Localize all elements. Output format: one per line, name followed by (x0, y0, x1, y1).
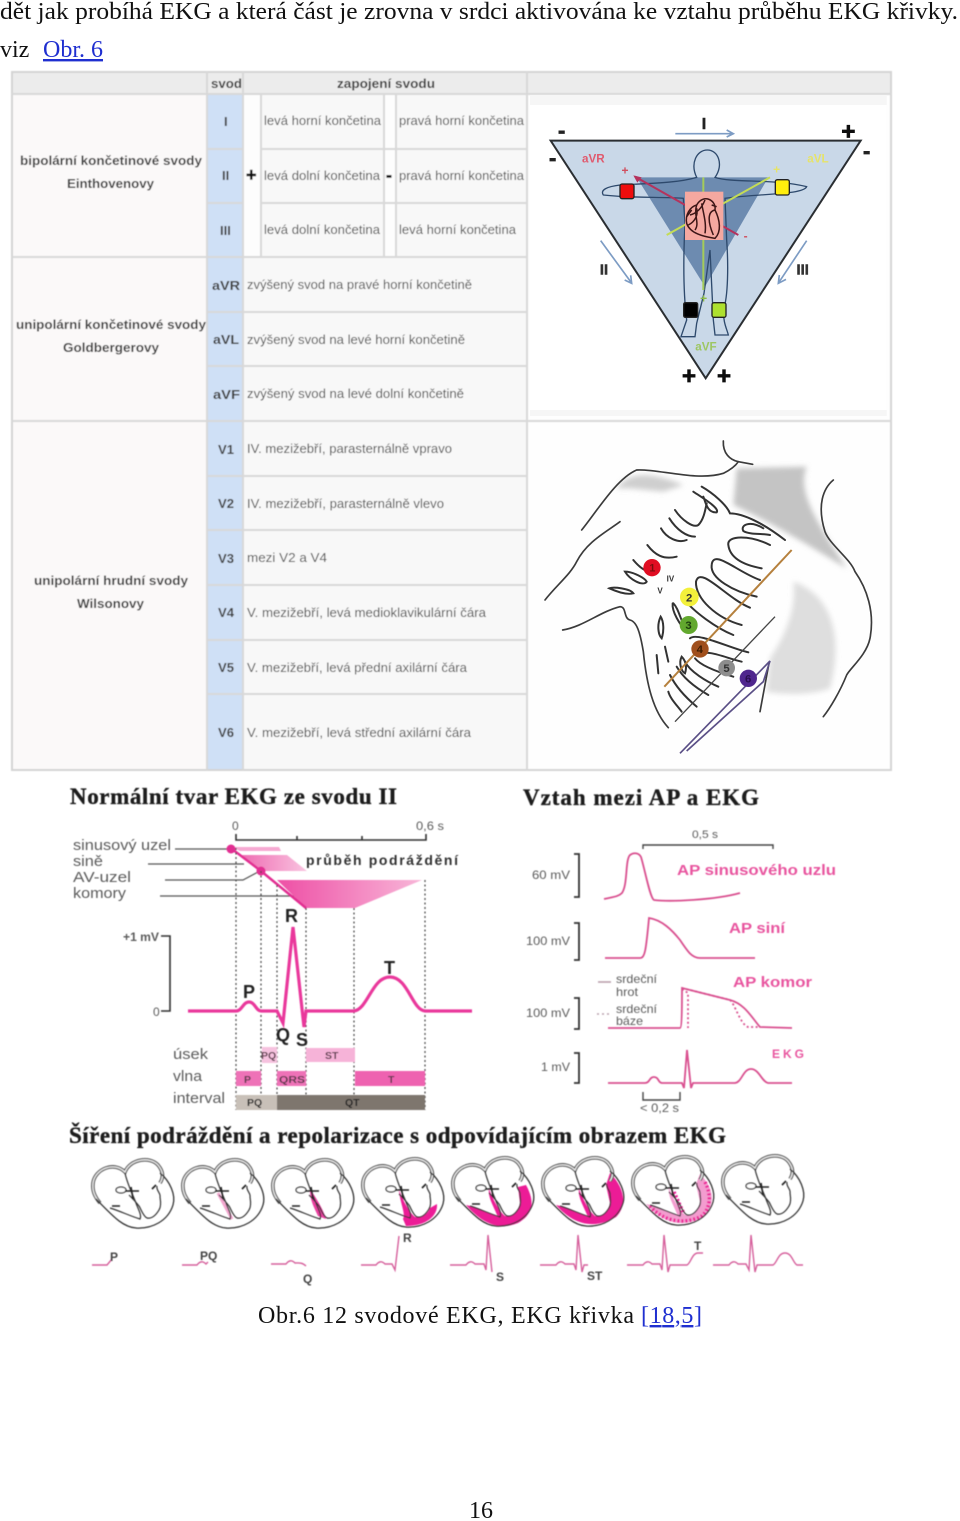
intro text line 2 with link: viz (0, 37, 29, 63)
segment bars: vlna (173, 1068, 203, 1085)
heart stage ST (543, 1158, 624, 1226)
triangle labels: + (700, 291, 707, 305)
triangle labels: + (621, 163, 628, 177)
lead wiring text: levá dolní končetina (264, 168, 381, 183)
triangle labels: + (682, 363, 696, 390)
chest electrode diagram (545, 441, 871, 753)
lead wiring text: pravá horní končetina (399, 113, 525, 128)
apex and base legend (597, 972, 658, 1028)
ECG fragment labels (110, 1231, 702, 1286)
ECG fragment labels: P (110, 1250, 118, 1264)
segment bars (173, 1046, 425, 1110)
ECG waveform (188, 927, 472, 1027)
amplitude scale (123, 932, 170, 1019)
ECG fragment labels: ST (587, 1269, 603, 1283)
voltage scales: 100 mV (526, 934, 570, 948)
wave letters: R (285, 906, 298, 926)
electrode V2 (680, 588, 699, 606)
triangle labels: II (600, 263, 608, 279)
time scale (640, 829, 773, 1115)
electrode V5: 5 (723, 663, 730, 675)
timescale: 0 (232, 819, 239, 833)
shoulder shading (617, 467, 847, 694)
triangle labels: - (558, 118, 565, 143)
excitation spread panel (69, 1122, 804, 1286)
apex and base legend: srdeční (616, 972, 658, 986)
heart stage Q (273, 1160, 354, 1228)
lead names: aVF (213, 387, 240, 402)
triangle labels: aVR (582, 152, 605, 165)
pink curve labels: EKG (772, 1047, 804, 1061)
triangle labels: - (863, 138, 870, 163)
lead wiring text: zvýšený svod na pravé horní končetině (247, 277, 472, 292)
intercostal labels: IV (667, 575, 675, 584)
lead direction arrows (601, 130, 807, 283)
normal ECG from lead II panel (70, 784, 472, 1110)
voltage scales (526, 854, 579, 1083)
group labels: Einthovenovy (67, 176, 155, 191)
lead names: III (220, 223, 231, 238)
electrode V6: 6 (745, 673, 751, 685)
pink curve labels: AP komor (733, 974, 812, 991)
lead names: aVL (213, 332, 239, 347)
voltage scales: 1 mV (541, 1060, 570, 1074)
action potential curves (604, 853, 792, 1088)
Einthoven triangle diagram (530, 96, 887, 416)
timescale: 0,6 s (416, 819, 444, 833)
segment bars: úsek (173, 1046, 209, 1063)
conduction labels: sinusový uzel (73, 837, 171, 854)
wave letters: T (384, 958, 395, 978)
heart stage PQ (183, 1160, 264, 1228)
conduction labels (73, 837, 296, 902)
segment bars: ST (325, 1050, 339, 1062)
lead wiring text: levá horní končetina (264, 113, 382, 128)
ECG fragment labels: R (403, 1231, 412, 1245)
anatomical heart (686, 199, 719, 238)
timing guides (236, 848, 425, 1110)
figure caption: Obr.6 12 svodové EKG, EKG křivka (258, 1303, 634, 1329)
electrode V4 (691, 640, 709, 658)
segment bars: PQ (247, 1097, 262, 1109)
lead wiring text: IV. mezižebří, parasternálně vlevo (247, 496, 444, 511)
lead names: V2 (218, 496, 234, 511)
lead wiring text: levá dolní končetina (264, 222, 381, 237)
panel heading: Normální tvar EKG ze svodu II (70, 784, 397, 809)
excitation spread wedges: průběh podráždění (306, 852, 459, 868)
lead names: V5 (218, 660, 234, 675)
segment bars: PQ (261, 1050, 276, 1062)
heart stage R (363, 1159, 444, 1227)
triangle labels (549, 116, 870, 390)
conduction labels: komory (73, 885, 127, 902)
vector lines (635, 177, 770, 290)
wave letters (243, 906, 395, 1050)
ECG leads table (12, 72, 891, 770)
ECG fragment labels: PQ (200, 1249, 217, 1263)
lead names: II (222, 168, 229, 183)
arm crease (680, 661, 770, 753)
voltage scales: 60 mV (532, 868, 570, 882)
group labels: Goldbergerovy (63, 340, 160, 355)
triangle labels: - (549, 146, 556, 171)
triangle labels: aVF (695, 340, 717, 353)
time scale: < 0,2 s (640, 1101, 679, 1115)
triangle labels: + (841, 119, 855, 146)
divider line (88, 1117, 803, 1119)
lead wiring text: zvýšený svod na levé horní končetině (247, 332, 465, 347)
segment bars: interval (173, 1090, 225, 1107)
apex and base legend: báze (616, 1014, 643, 1028)
ECG fragment labels: T (694, 1239, 702, 1253)
conduction labels: AV-uzel (73, 869, 131, 886)
group labels: unipolární hrudní svody (34, 573, 189, 588)
intercostal labels (657, 575, 675, 595)
lead names: aVR (212, 278, 241, 293)
pink curve labels (677, 862, 836, 1061)
electrode V4: 4 (697, 644, 704, 656)
lead wiring text: pravá horní končetina (399, 168, 525, 183)
lead names (212, 114, 241, 740)
pink curve labels: AP siní (729, 920, 786, 937)
body contour lines (545, 441, 871, 728)
lead names: V1 (218, 442, 234, 457)
electrode V6 (740, 670, 757, 687)
group labels (16, 153, 207, 611)
apex and base legend: hrot (616, 985, 639, 999)
segment bars: QT (345, 1097, 360, 1109)
pink curve labels: AP sinusového uzlu (677, 862, 836, 879)
excitation spread wedges (226, 844, 459, 908)
amplitude scale: +1 mV (123, 932, 159, 944)
AP vs ECG panel (523, 785, 836, 1115)
lead wiring text (246, 113, 525, 740)
triangle labels: + (773, 162, 780, 176)
table header: svod (211, 76, 242, 91)
time scale: 0,5 s (692, 829, 719, 841)
heart square (685, 192, 723, 240)
group labels: bipolární končetinové svody (20, 153, 203, 168)
lead wiring text: V. mezižebří, levá přední axilární čára (247, 660, 468, 675)
electrode V5 (718, 660, 735, 676)
lead wiring text: + (246, 165, 257, 185)
electrode V1: 1 (649, 563, 655, 575)
segment bars: P (244, 1074, 251, 1086)
segment bars: QRS (279, 1074, 305, 1086)
heart stage T (633, 1157, 714, 1225)
lead wiring text: zvýšený svod na levé dolní končetině (247, 386, 464, 401)
table header (211, 76, 435, 91)
ECG fragments (92, 1235, 803, 1272)
triangle labels: + (717, 363, 731, 390)
lead wiring text: V. mezižebří, levá medioklavikulární čára (247, 605, 487, 620)
panel heading: Vztah mezi AP a EKG (523, 785, 759, 810)
midclavicular line (664, 550, 792, 687)
heart stage P (93, 1160, 174, 1228)
heart stage recovered (723, 1156, 804, 1224)
group labels: unipolární končetinové svody (16, 317, 207, 332)
lead wiring text: V. mezižebří, levá střední axilární čára (247, 725, 472, 740)
apex and base legend: srdeční (616, 1002, 658, 1016)
lead names: V4 (218, 605, 235, 620)
lead wiring text: - (386, 165, 392, 185)
wave letters: Q (276, 1025, 290, 1045)
electrode V1 (643, 559, 661, 576)
triangle labels: III (797, 263, 809, 279)
segment bars: T (388, 1074, 395, 1086)
electrode V3 (680, 616, 698, 634)
ECG fragment labels: Q (303, 1272, 312, 1286)
lead names: V6 (218, 725, 234, 740)
ECG fragment labels: S (496, 1270, 504, 1284)
intro text line 2 with link: Obr. 6 (43, 37, 103, 63)
electrode V2: 2 (686, 592, 692, 604)
body outline (602, 150, 807, 337)
heart stage S (453, 1158, 534, 1226)
inner dark triangle (637, 177, 768, 287)
conduction labels: sině (73, 853, 103, 870)
table header: zapojení svodu (337, 76, 435, 91)
wave letters: P (243, 982, 255, 1002)
panel heading: Šíření podráždění a repolarizace s odpovídajícím obrazem EKG (69, 1122, 726, 1148)
triangle labels: I (702, 116, 706, 133)
timescale (232, 819, 444, 840)
lead wiring text: mezi V2 a V4 (247, 550, 327, 565)
lead names: I (224, 114, 228, 129)
voltage scales: 100 mV (526, 1006, 570, 1020)
amplitude scale: 0 (153, 1005, 160, 1019)
lead wiring text: levá horní končetina (399, 222, 517, 237)
axillary line (675, 617, 775, 722)
lead wiring text: IV. mezižebří, parasternálně vpravo (247, 441, 452, 456)
electrodes (620, 180, 789, 317)
group labels: Wilsonovy (77, 596, 145, 611)
triangle labels: - (744, 229, 748, 243)
caption reference link: [18,5] (641, 1303, 702, 1329)
intercostal labels: V (657, 586, 663, 595)
electrode V3: 3 (685, 620, 692, 632)
lead names: V3 (218, 551, 234, 566)
wave letters: S (296, 1030, 308, 1050)
triangle labels: aVL (807, 153, 829, 166)
ribs (609, 487, 785, 712)
